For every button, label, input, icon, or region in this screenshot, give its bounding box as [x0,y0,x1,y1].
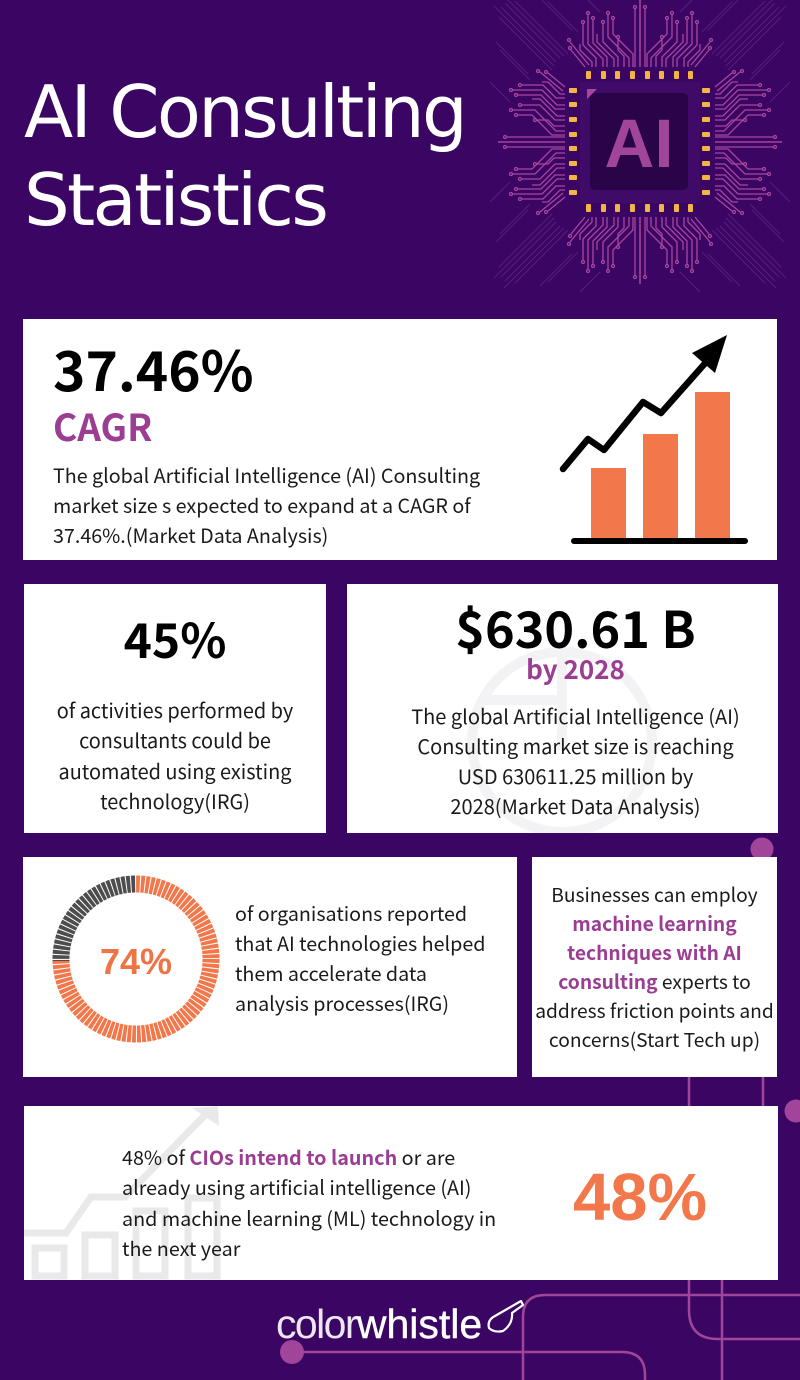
panel: machine learning [532,857,777,1077]
panel: CIOs 48% [24,1106,778,1280]
title: Statistics [24,158,326,242]
text: machine learning description: techniques with AI [567,938,742,966]
text: market size description: The global Artificial Intelligence (AI) [411,701,740,730]
heading: CAGR: CAGR [53,398,152,452]
icon: AI chip with circuit traces: AI [604,105,674,182]
text: automation description [57,695,293,815]
icon: growth bar chart with arrow [560,335,748,544]
stat: $630.61 B: $630.61 B [455,590,696,663]
watermark: growth chart [24,1106,220,1280]
text: market size description: 2028(Market Data Analysis) [450,791,701,820]
text: market size description: USD 630611.25 million by [458,761,693,790]
logo wordmark: colorwhistle [276,1301,482,1347]
text: market size description [411,701,740,820]
panel: market size [347,584,778,833]
text: organisations description: that AI technologies helped [235,928,485,957]
icon: AI chip with circuit traces [490,0,790,292]
text: machine learning description: concerns(Start Tech up) [549,1025,760,1053]
text: CAGR description: 37.46%.(Market Data Analysis) [53,520,328,549]
text: CIOs description: 48% of CIOs intend to launch or are [122,1142,455,1171]
text: CIOs description: and machine learning (ML) technology in [122,1203,496,1232]
title [24,70,465,242]
text: automation description: technology(IRG) [100,786,250,815]
text: automation description: automated using existing [59,756,291,785]
panel: 74% organisations [23,857,517,1077]
text: machine learning description: consulting experts to [558,967,751,995]
text: CIOs description [122,1142,496,1262]
text: CIOs description: already using artificial intelligence (AI) [122,1172,471,1201]
text: machine learning description [535,880,774,1053]
heading: by 2028: by 2028 [526,650,625,687]
text: machine learning description: machine learning [572,909,737,937]
text: CAGR description: market size s expected to expand at a CAGR of [53,490,471,519]
title: AI Consulting [24,70,465,154]
logo: colorwhistle [276,1300,524,1347]
panel: 45% automation [24,584,326,833]
text: organisations description: analysis processes(IRG) [235,988,449,1017]
text: machine learning description: Businesses can employ [551,880,758,908]
text: CIOs description: the next year [122,1233,240,1262]
text: automation description: consultants could be [79,725,271,754]
text: organisations description: of organisations reported [235,898,467,927]
text: organisations description: them accelerate data [235,958,427,987]
text: market size description: Consulting market size is reaching [417,731,734,760]
donut chart: 74%: 74% [100,941,172,982]
stat: 45%: 45% [124,602,226,672]
donut chart: 74% [52,876,220,1042]
panel: CAGR [23,319,777,560]
text: organisations description [235,898,485,1017]
text: CAGR description [53,460,480,549]
text: automation description: of activities performed by [57,695,293,724]
text: CAGR description: The global Artificial Intelligence (AI) Consulting [53,460,480,489]
stat: 37.46%: 37.46% [53,327,254,407]
icon: whistle [488,1300,524,1333]
watermark: pie chart [467,647,657,833]
stat: 48%: 48% [573,1160,707,1235]
text: machine learning description: address friction points and [535,996,774,1024]
